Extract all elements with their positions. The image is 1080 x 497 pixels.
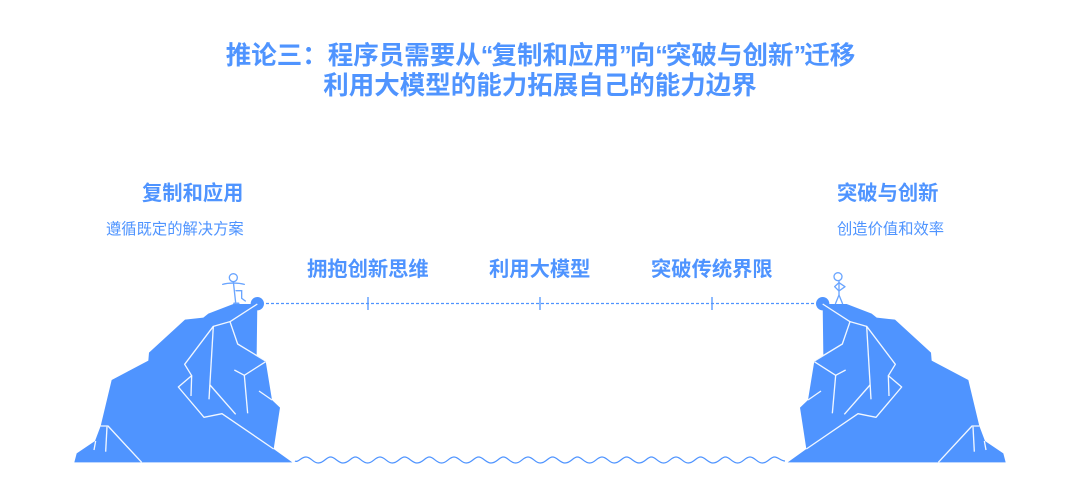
right cliff bbox=[788, 297, 1006, 462]
left rock body bbox=[74, 304, 292, 462]
dashed bridge line bbox=[266, 297, 816, 310]
right rock body bbox=[788, 304, 1006, 462]
left anchor dot bbox=[251, 297, 264, 310]
title line 1: 推论三：程序员需要从“复制和应用”向“突破与创新”迁移 bbox=[226, 42, 855, 70]
right anchor dot bbox=[816, 297, 829, 310]
left heading: 复制和应用 bbox=[142, 183, 243, 205]
step label: use large models: 利用大模型 bbox=[489, 259, 590, 281]
water waves bbox=[295, 457, 785, 463]
left cliff bbox=[74, 274, 292, 462]
right description: 创造价值和效率 bbox=[837, 221, 944, 238]
step label: break traditional limits: 突破传统界限 bbox=[651, 259, 773, 281]
left rock cracks bbox=[94, 304, 274, 462]
title line 2: 利用大模型的能力拓展自己的能力边界 bbox=[323, 72, 757, 100]
right heading: 突破与创新 bbox=[837, 183, 938, 205]
step label: embrace innovative thinking: 拥抱创新思维 bbox=[307, 259, 429, 281]
left stick figure running bbox=[223, 274, 245, 303]
right rock cracks bbox=[806, 304, 986, 462]
left description: 遵循既定的解决方案 bbox=[106, 221, 244, 238]
title bbox=[226, 42, 855, 100]
right stick figure standing bbox=[834, 273, 845, 304]
